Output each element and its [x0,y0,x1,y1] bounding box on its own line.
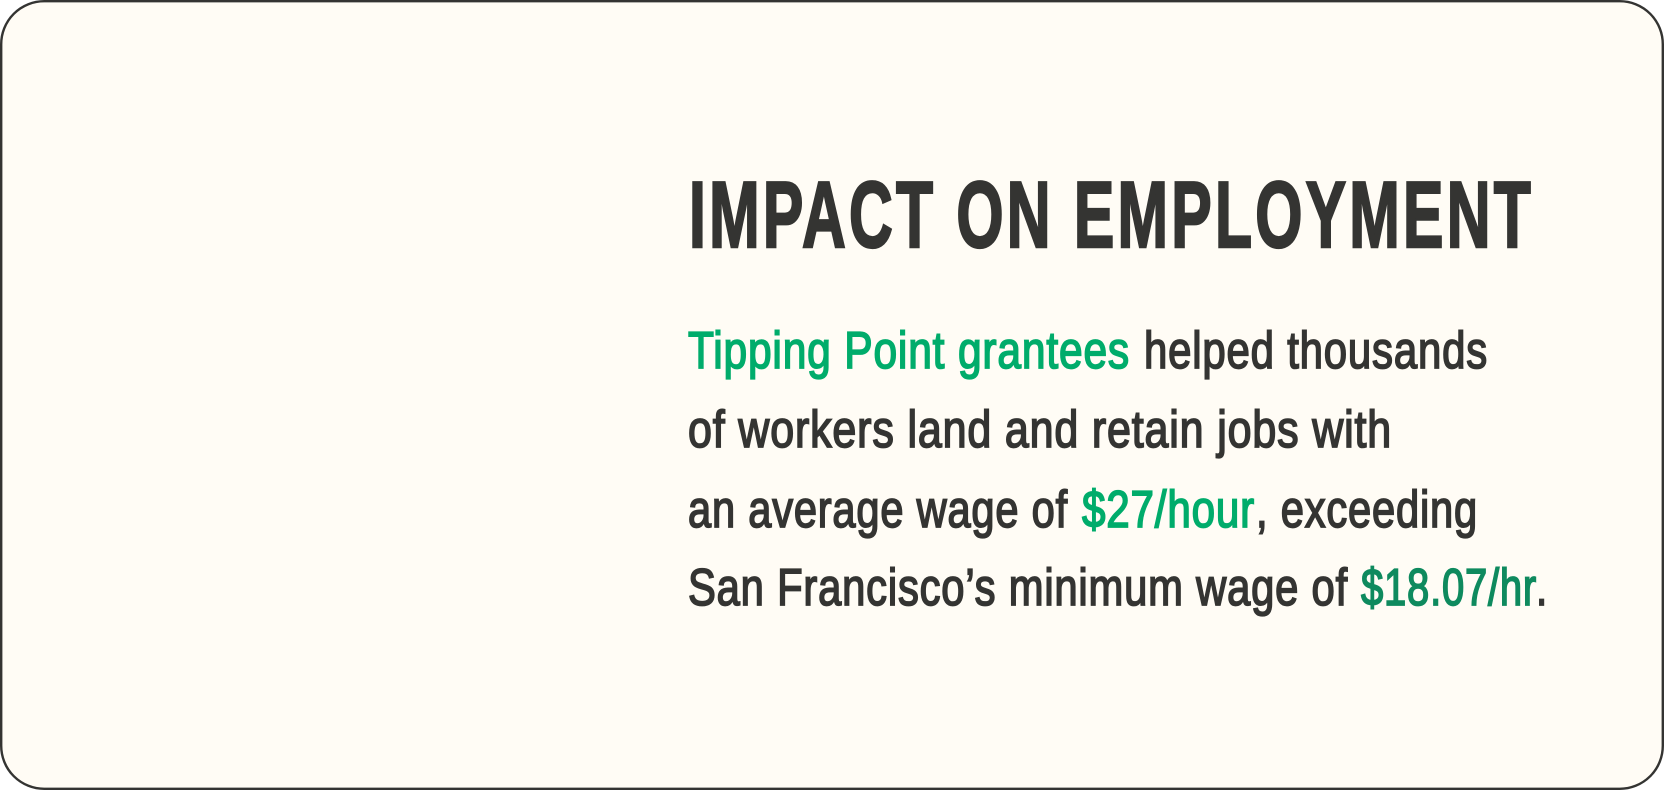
line 3: an average wage of [688,481,1068,539]
line 1: Tipping Point grantees [688,322,1130,380]
line 3: , exceeding [1256,481,1478,539]
line 3 [688,481,1478,539]
line 4: $18.07/hr [1361,559,1537,617]
line 2: of workers land and retain jobs with [688,401,1392,459]
line 4: . [1536,559,1548,617]
line 3: $27/hour [1082,481,1255,539]
line 1: helped thousands [1144,322,1488,380]
text block: description [688,322,1548,617]
line 4: San Francisco’s minimum wage of [688,559,1348,617]
line 1 [688,322,1488,380]
